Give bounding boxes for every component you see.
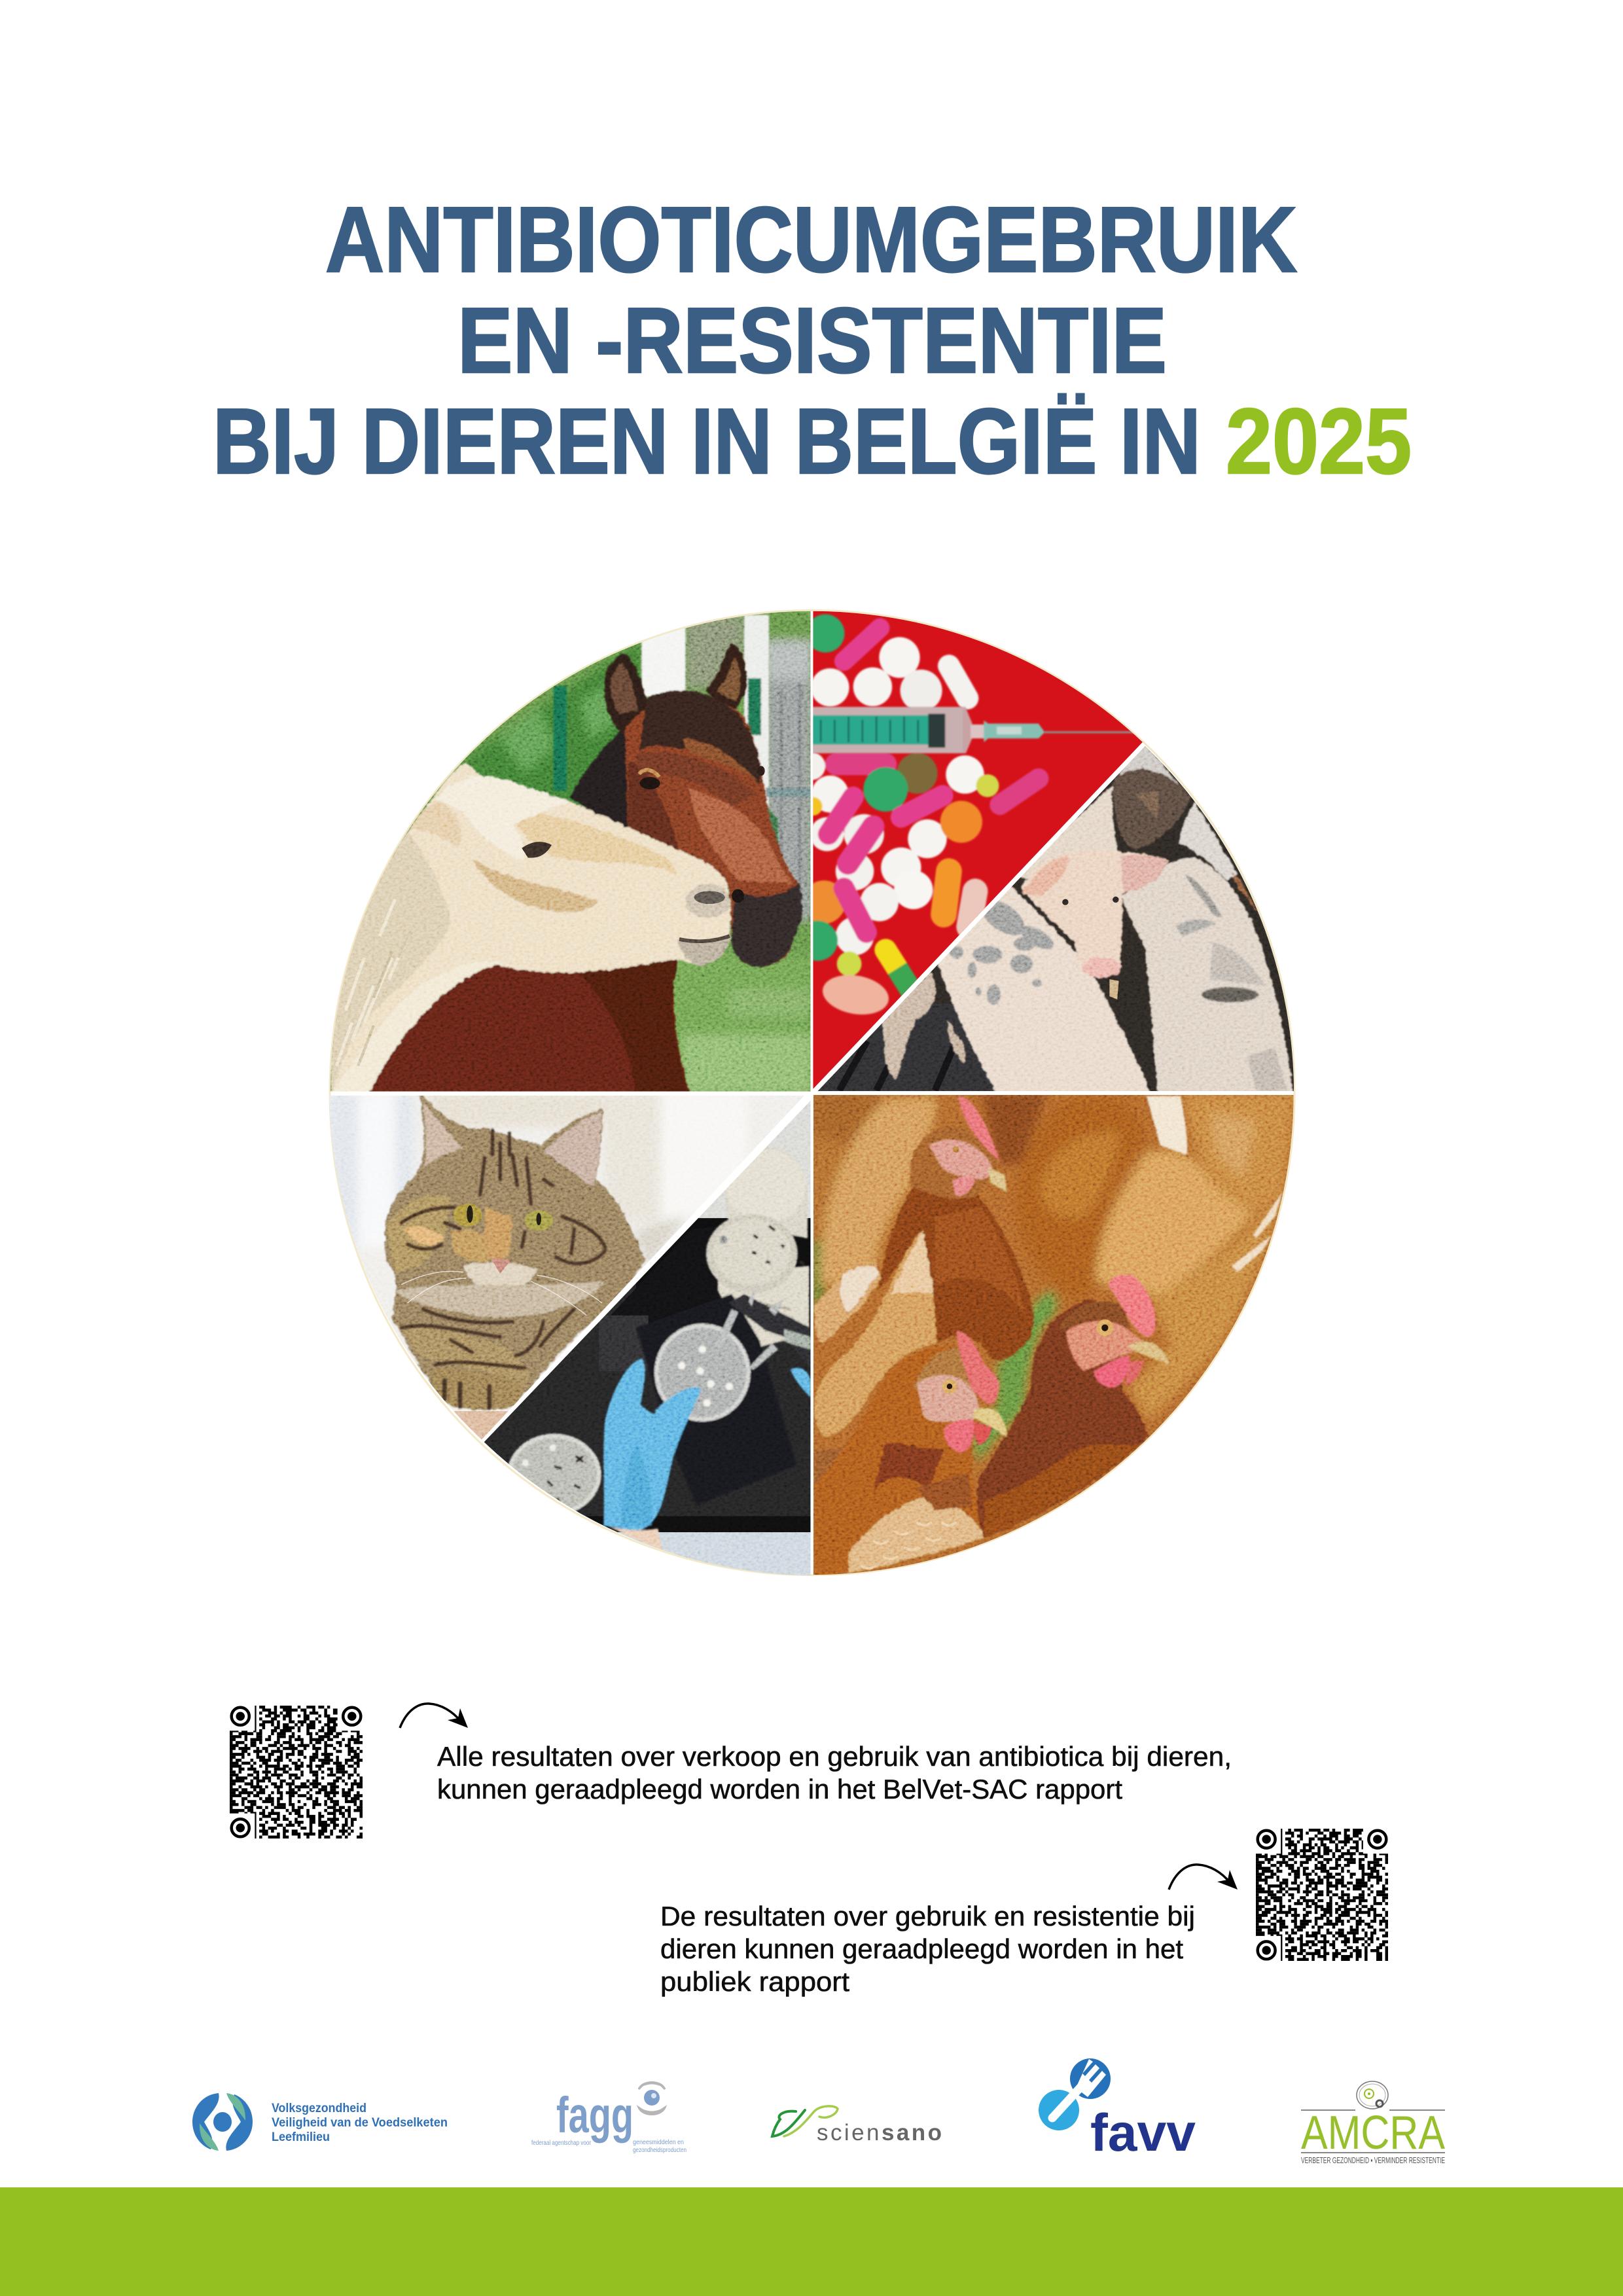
agency name: gezondheidsproducten [633, 2146, 687, 2154]
logo: AMCRA [1301, 2081, 1445, 2165]
title: 2025 [1226, 389, 1412, 493]
photo: pills and syringe on red [798, 609, 1151, 1094]
tagline: VERBETER GEZONDHEID ▪ VERMINDER RESISTENTIE [1301, 2155, 1445, 2165]
ministry names: Veiligheid van de Voedselketen [272, 2116, 448, 2130]
ministry names: Volksgezondheid [272, 2102, 366, 2115]
text: publiek rapport: dieren kunnen geraadpleegd worden in het [660, 1933, 1183, 1964]
agency name: geneesmiddelen en [633, 2138, 684, 2146]
arrow: towards second qr code [1169, 1865, 1238, 1890]
icon: petri dish [1357, 2081, 1388, 2109]
ministry names: Leefmilieu [272, 2130, 330, 2144]
text: publiek rapport: publiek rapport [660, 1966, 849, 1997]
photo: horses [327, 609, 812, 1094]
combs, beaks, wattles [916, 1096, 1169, 1453]
wordmark: fagg [556, 2087, 633, 2144]
arrow: towards first text [400, 1704, 468, 1728]
qr code: BelVet-SAC rapport [230, 1706, 363, 1839]
logo: Volksgezondheid [192, 2093, 448, 2151]
logo: sciensano [772, 2106, 942, 2145]
wordmark: sciensano [817, 2120, 942, 2145]
icon: ministry emblem [192, 2093, 253, 2151]
icon: fork in circles [1039, 2058, 1111, 2130]
footer bar [0, 2187, 1623, 2296]
pills [798, 614, 1039, 1020]
text: BelVet-SAC: Alle resultaten over verkoop en gebruik van antibiotica bij dieren, [437, 1741, 1232, 1772]
title: EN -RESISTENTIE [457, 289, 1167, 393]
logo: fagg [531, 2083, 687, 2154]
agency name: federaal agentschap voor [531, 2139, 591, 2147]
finder marks [1256, 1829, 1388, 1961]
eyes [454, 1204, 553, 1230]
wordmark: AMCRA [1301, 2107, 1445, 2159]
icon: eye [639, 2083, 665, 2114]
agency name [531, 2138, 687, 2154]
logo: favv [1039, 2058, 1196, 2162]
finder marks [230, 1706, 363, 1839]
photo: hens [812, 1093, 1296, 1578]
wordmark: favv [1090, 2104, 1196, 2162]
text: BelVet-SAC: kunnen geraadpleegd worden in het BelVet-SAC rapport [437, 1774, 1122, 1804]
outer rim [330, 610, 1294, 1575]
text: publiek rapport: De resultaten over gebruik en resistentie bij [660, 1901, 1195, 1931]
photo: cat [327, 1093, 812, 1442]
title: ANTIBIOTICUMGEBRUIK [325, 188, 1297, 292]
text: publiek rapport [660, 1901, 1195, 1997]
icon: leaf [772, 2106, 838, 2136]
title: BIJ DIEREN IN BELGIË IN [213, 389, 1201, 493]
text: BelVet-SAC [437, 1741, 1232, 1804]
photo: petri dishes in lab [476, 1093, 812, 1579]
title [213, 188, 1412, 493]
qr code: publiek rapport [1256, 1829, 1388, 1961]
ministry names [272, 2102, 448, 2144]
photo: pigs [812, 732, 1296, 1094]
photo circle [327, 609, 1296, 1579]
syringe [812, 707, 1134, 753]
